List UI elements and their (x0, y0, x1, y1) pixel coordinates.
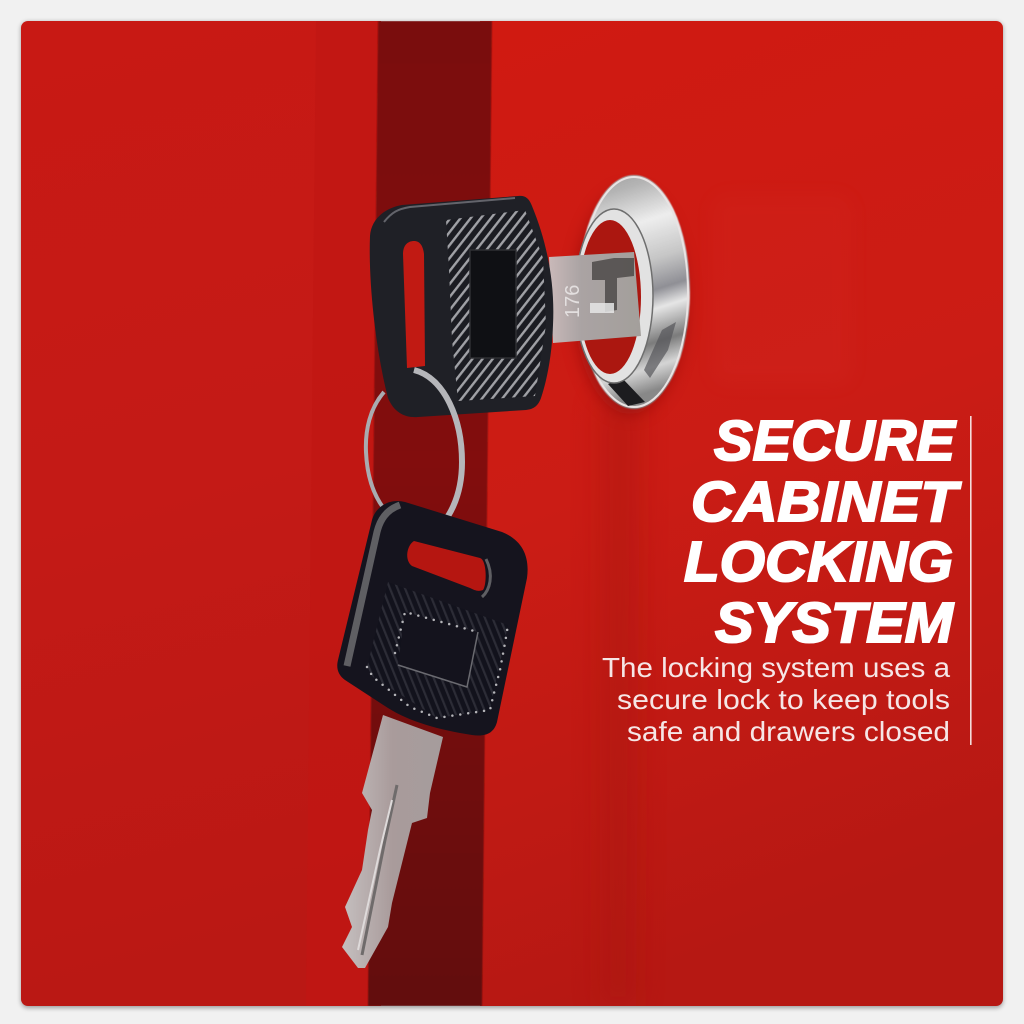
lower grip dotted border (367, 625, 508, 718)
lower fob slot inner edge (482, 559, 490, 597)
recess edge highlight (398, 632, 478, 687)
dark gap between doors (368, 21, 492, 1006)
lower fob body (337, 501, 528, 735)
faint door reflection (712, 195, 852, 385)
lower center label recess (398, 612, 478, 687)
key blade hanging (342, 715, 443, 968)
lower hatched grip (367, 582, 508, 718)
blade body (549, 252, 641, 343)
key ring rear arc (366, 392, 385, 510)
lower key fob (337, 501, 528, 735)
lock shadow (574, 190, 686, 414)
blade notch highlight (590, 303, 614, 313)
lower fob highlight edge (347, 505, 400, 666)
bezel dark reflections (608, 378, 645, 406)
chrome bezel (578, 175, 690, 409)
bezel outer rim (580, 177, 688, 407)
hatched grip (446, 210, 546, 401)
heading: SYSTEM (715, 591, 955, 655)
key blade in lock (549, 252, 641, 343)
heading: LOCKING (684, 530, 953, 594)
key number: 176 (562, 285, 584, 318)
heading (684, 409, 961, 655)
left door side edge (306, 21, 378, 1006)
lower fob slot (407, 541, 486, 591)
vertical divider line (970, 416, 972, 745)
upper key fob (370, 196, 553, 417)
description text (602, 652, 950, 747)
red keyway opening (579, 220, 641, 374)
center label recess (470, 250, 516, 358)
recess dotted border (395, 612, 478, 653)
description text: safe and drawers closed (627, 716, 950, 747)
heading: SECURE (714, 409, 957, 473)
heading: CABINET (691, 470, 961, 534)
description text: secure lock to keep tools (617, 684, 950, 715)
fob body (370, 196, 553, 417)
blade groove (362, 785, 397, 955)
fob slot (403, 241, 425, 368)
fob highlight edge (384, 198, 515, 222)
lock assembly (574, 175, 690, 414)
right cabinet door (480, 21, 1003, 1006)
hanging blade body (342, 715, 443, 968)
blade notch (592, 258, 634, 312)
description text: The locking system uses a (602, 652, 950, 683)
left cabinet door (21, 21, 381, 1006)
bezel lower streak (644, 322, 676, 378)
key ring front segment (414, 370, 462, 537)
lock shadow on door (600, 410, 639, 844)
chrome rim (575, 209, 653, 383)
blade groove highlight (358, 800, 392, 950)
